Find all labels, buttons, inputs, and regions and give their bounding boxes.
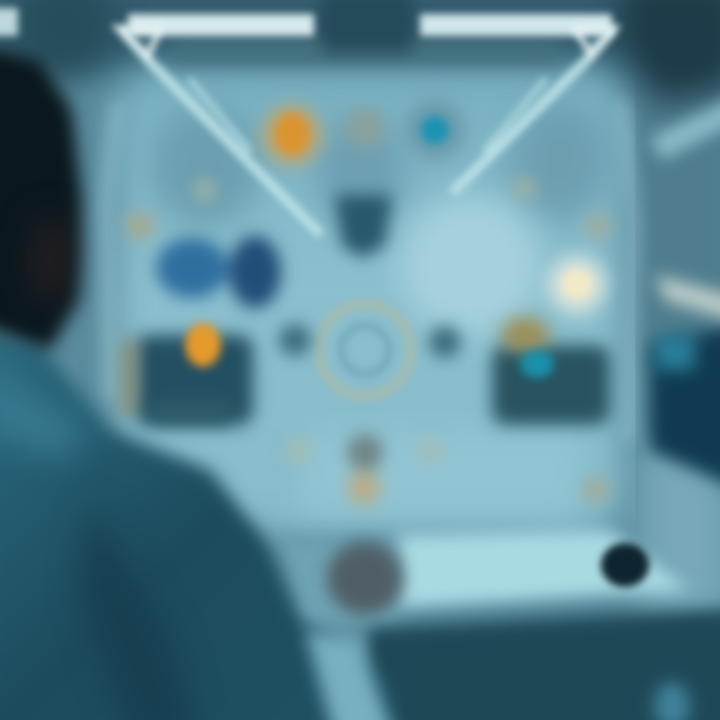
icon: connector between top nodes [345,108,385,148]
crossing light beams [118,28,615,232]
icon: teal node [405,100,465,160]
icon: grey knob [327,541,403,615]
top dark ceiling bar [170,0,560,62]
desk glow [280,530,690,625]
panel side frames [105,100,635,440]
right monitor [650,275,720,490]
light frame bars [0,8,612,36]
icon: central ring [319,304,411,396]
person: torso [0,330,400,720]
icon: orange node [262,105,322,165]
small connector nodes [126,177,610,503]
desk dark foreground [350,608,720,720]
icon: black knob [601,543,649,587]
holographic panel [118,70,623,535]
icon: left orange module [122,323,253,425]
icon: right teal module [492,317,610,425]
top right and left corners [20,0,720,105]
icon: blue cloud cluster [156,236,281,308]
icon: glowing cream node [547,255,607,315]
person: head [0,45,82,350]
top right light streak [650,95,720,160]
icon: dark hexagon node [335,195,392,258]
icon: bottom center nodes [347,434,383,505]
